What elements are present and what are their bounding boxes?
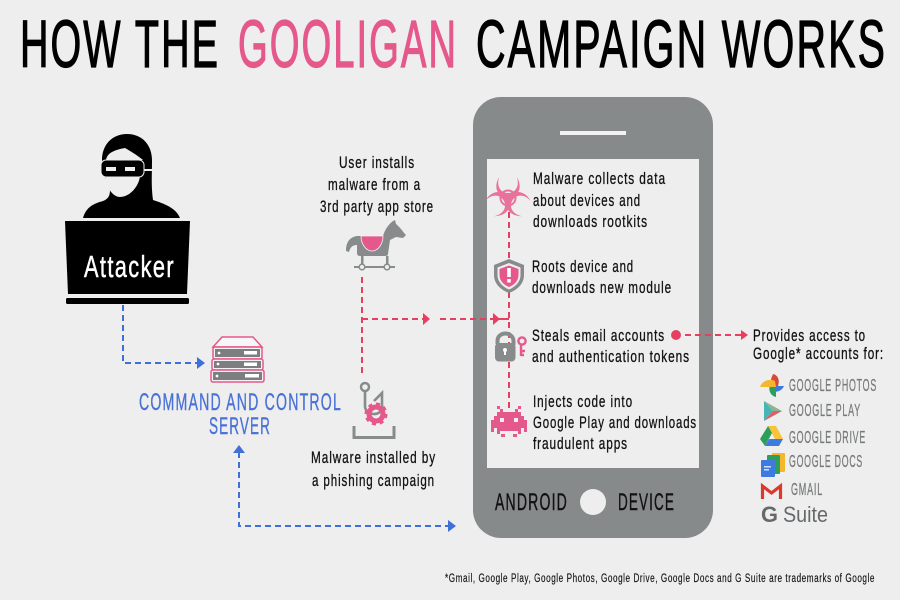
icon: space invader: [491, 406, 527, 437]
text: injects code: Google Play and downloads: [533, 413, 697, 432]
icon: trojan horse: [346, 220, 406, 270]
text: injects code: [533, 392, 697, 453]
icon: shield: [494, 259, 524, 293]
icon: attacker with laptop: Attacker: [84, 249, 175, 284]
label: command and control server: COMMAND AND CONTROL: [139, 389, 342, 416]
icon: attacker with laptop: [65, 134, 190, 304]
panel: android phone: DEVICE: [618, 489, 675, 516]
icon: google drive: [760, 426, 783, 446]
text: malware installed by phishing: a phishing campaign: [312, 471, 435, 490]
text: malware collects data: downloads rootkits: [533, 212, 648, 231]
text: user installs malware: User installs: [339, 153, 415, 172]
icon: google docs: [761, 453, 785, 477]
icon: phishing hook: [354, 383, 394, 438]
logo: g suite: [761, 502, 828, 527]
text: user installs malware: 3rd party app store: [320, 197, 434, 216]
text: injects code: Injects code into: [533, 392, 633, 411]
panel: android phone: ANDROID: [495, 489, 568, 516]
title: HOW THE: [20, 7, 220, 82]
text: malware collects data: Malware collects data: [533, 169, 666, 188]
icon: biohazard: [484, 177, 532, 219]
text: user installs malware: malware from a: [328, 175, 421, 194]
text: malware collects data: [533, 169, 666, 231]
text: steals email accounts: [532, 326, 690, 366]
label: command and control server: SERVER: [209, 413, 271, 440]
arrow: infection paths into device: [362, 210, 509, 408]
label: gmail: GMAIL: [791, 479, 823, 499]
title: [20, 7, 887, 82]
text: provides access: [753, 326, 884, 363]
label: command and control server: [139, 389, 342, 440]
arrow: stolen accounts to google services: [671, 330, 748, 340]
icon: google photos: [760, 374, 784, 397]
text: roots device: Roots device and: [532, 257, 634, 276]
text: malware collects data: about devices and: [533, 191, 641, 210]
arrow: server to android device: [233, 445, 456, 532]
text: injects code: fraudulent apps: [533, 434, 628, 453]
text: malware installed by phishing: [311, 448, 436, 490]
logo: g suite: G: [761, 502, 778, 527]
icon: server: [211, 337, 264, 382]
logo: g suite: Suite: [783, 502, 828, 527]
text: user installs malware: [320, 153, 434, 216]
text: roots device: downloads new module: [532, 278, 672, 297]
text: roots device: [532, 257, 672, 297]
icon: open lock and key: [495, 334, 526, 362]
text: steals email accounts: and authentication tokens: [532, 347, 690, 366]
icon: gmail: [762, 486, 780, 499]
icon: google play: [764, 401, 782, 421]
title: GOOLIGAN: [238, 7, 458, 82]
text: malware installed by phishing: Malware installed by: [311, 448, 436, 467]
arrow: attacker to command server: [123, 305, 205, 369]
text: steals email accounts: Steals email accounts: [532, 326, 665, 345]
panel: android phone: [473, 97, 713, 538]
